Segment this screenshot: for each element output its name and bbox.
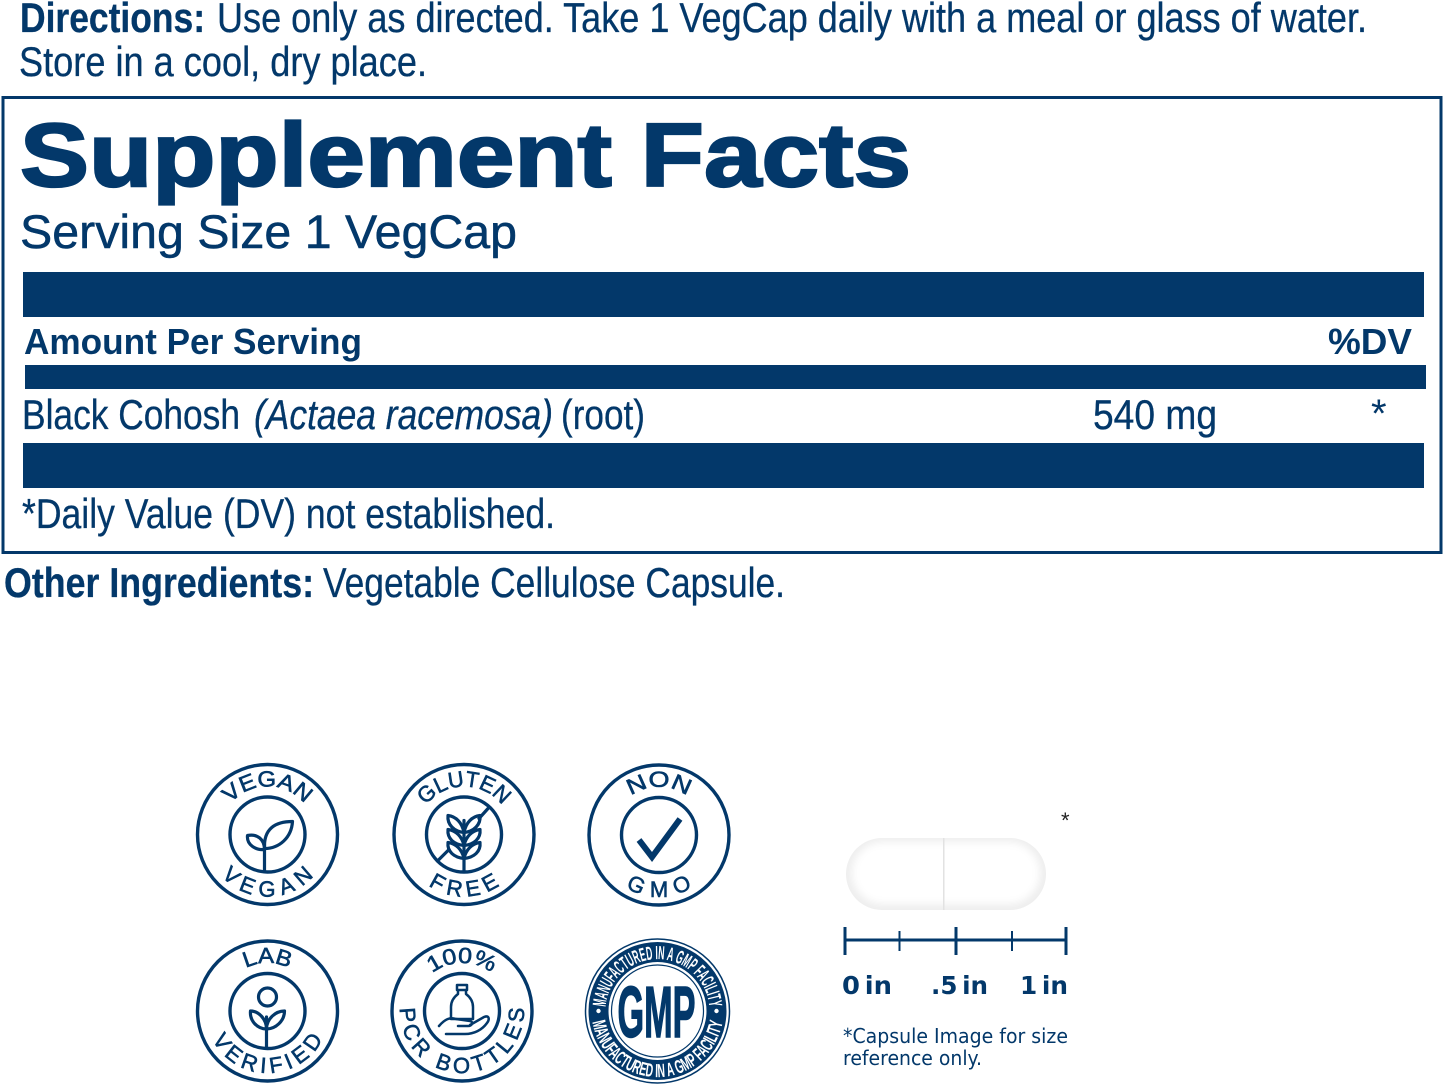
badge: non gmo: GMO [628, 876, 690, 898]
badge: non gmo [587, 763, 731, 907]
top bar [23, 272, 1424, 317]
percent daily value header: %DV [1328, 321, 1412, 362]
ruler labels [842, 971, 1068, 1000]
badge: gmp [584, 938, 730, 1084]
badge: gluten free: GLUTEN [418, 770, 512, 804]
bottom bar [23, 443, 1424, 488]
panel border [3, 98, 1441, 552]
badge: gmp: MANUFACTURED IN A GMP FACILITY [592, 946, 722, 1006]
badge: pcr bottles: PCR BOTTLES [399, 1008, 524, 1074]
badge: non gmo: NON [626, 771, 692, 795]
other ingredients text: Other Ingredients: [4, 559, 314, 606]
capsule note [843, 1024, 1068, 1070]
ruler labels: 1 in [1020, 971, 1068, 1000]
ingredient row [22, 391, 1387, 438]
ruler labels: .5 in [931, 971, 988, 1000]
ingredient row: 540 mg [1093, 391, 1217, 438]
badge: pcr bottles: 100% [427, 948, 496, 972]
ruler labels: 0 in [842, 971, 892, 1000]
badge: lab verified: LAB [242, 948, 292, 968]
capsule image [846, 838, 1046, 910]
capsule note: *Capsule Image for size [843, 1024, 1068, 1048]
other ingredients text [4, 559, 785, 606]
badge: vegan [196, 762, 340, 906]
ingredient row: * [1371, 392, 1387, 436]
middle bar [25, 365, 1426, 389]
badge: vegan: VEGAN [225, 864, 313, 898]
badge: pcr bottles [390, 939, 534, 1083]
ingredient row: (Actaea racemosa) [254, 391, 553, 438]
badge: gluten free: FREE [429, 872, 500, 898]
serving size: Serving Size 1 VegCap [20, 205, 517, 258]
badge: gmp: MANUFACTURED IN A GMP FACILITY [592, 1019, 722, 1078]
ingredient row: Black Cohosh [22, 391, 240, 438]
ingredient row: (root) [561, 391, 645, 438]
amount per serving header: Amount Per Serving [24, 321, 362, 362]
badge: gmp: GMP [618, 973, 696, 1053]
directions text [19, 0, 1367, 85]
asterisk marker: * [1061, 808, 1070, 833]
panel: supplement facts [3, 98, 1441, 552]
badge: vegan: VEGAN [220, 770, 314, 802]
badge: gluten free [392, 762, 536, 906]
capsule note: reference only. [843, 1046, 982, 1070]
badge: lab verified: VERIFIED [215, 1030, 320, 1074]
badge: lab verified [196, 939, 340, 1083]
directions text: Store in a cool, dry place. [19, 38, 427, 85]
other ingredients text: Vegetable Cellulose Capsule. [323, 559, 785, 606]
heading: supplement facts: Supplement Facts [20, 106, 911, 206]
size ruler [845, 927, 1066, 955]
daily value note: *Daily Value (DV) not established. [22, 490, 555, 537]
